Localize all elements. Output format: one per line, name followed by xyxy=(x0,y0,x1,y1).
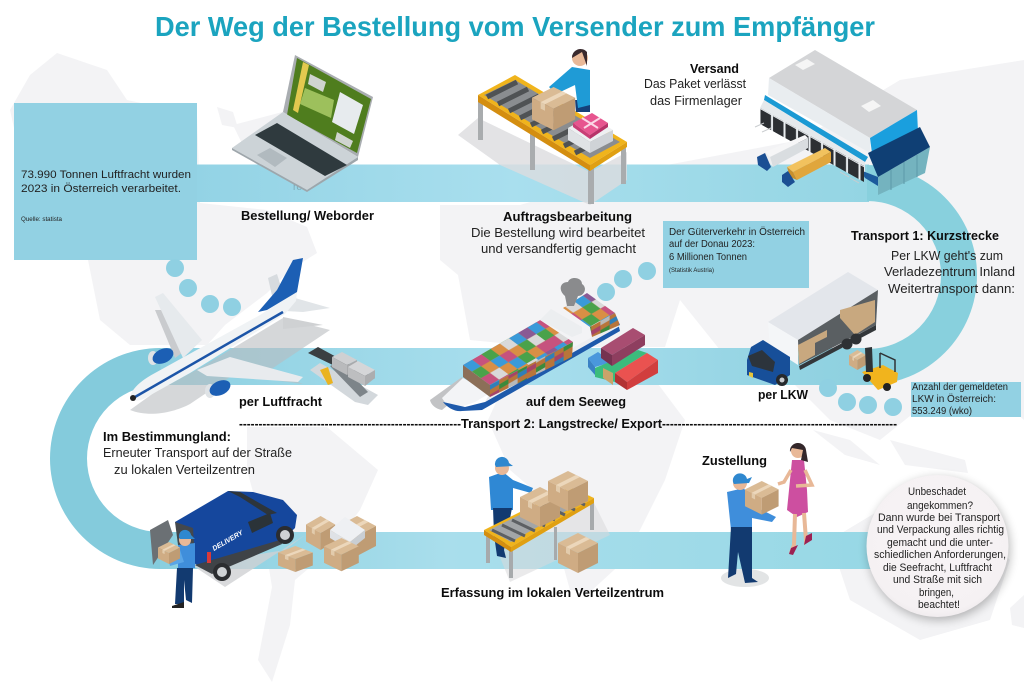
label: auf dem Seeweg: auf dem Seeweg xyxy=(526,394,626,409)
label: Auftragsbearbeitung: und versandfertig gemacht xyxy=(481,241,636,256)
icon: container ship xyxy=(430,278,620,411)
heading: Transport 2 with dashes: ------------------------------------------------------------ xyxy=(662,416,897,431)
label: Zustellung: Zustellung xyxy=(702,453,767,468)
label: Bestellung: Bestellung/ Weborder xyxy=(241,208,374,223)
info box: LKW: 553.249 (wko) xyxy=(912,406,972,417)
label: Im Bestimmungland: Im Bestimmungland: xyxy=(103,429,231,444)
dots: Donau xyxy=(597,262,656,301)
callout circle: gemacht und die unter- xyxy=(887,537,993,549)
info box: LKW: LKW in Österreich: xyxy=(912,393,996,405)
heading: Transport 2 with dashes: Transport 2: Langstrecke/ Export xyxy=(461,416,663,431)
callout circle: beachtet! xyxy=(918,599,960,611)
info box: Luftfracht xyxy=(14,103,197,260)
label: per LKW: per LKW xyxy=(758,387,809,402)
icon: courier handing parcel to customer xyxy=(721,443,812,587)
icon: packing table with worker xyxy=(458,49,627,205)
dots: LKW xyxy=(819,379,902,416)
route band xyxy=(50,164,977,569)
label: per Luftfracht: per Luftfracht xyxy=(239,394,323,409)
callout circle: bringen, xyxy=(919,587,954,599)
label: Auftragsbearbeitung: Auftragsbearbeitung xyxy=(503,209,632,224)
icon: scanning worker at conveyor xyxy=(484,457,610,582)
callout circle: und Straße mit sich xyxy=(893,574,982,586)
label: Im Bestimmungland xyxy=(103,429,292,477)
icon: parcels xyxy=(278,516,376,572)
info box: LKW xyxy=(911,382,1021,417)
label: Versand: Das Paket verlässt xyxy=(644,76,746,91)
icon: stacked containers xyxy=(588,328,658,390)
callout circle: schiedlichen Anforderungen, xyxy=(874,549,1006,561)
callout circle: Unbeschadet xyxy=(908,486,966,498)
icon: airplane xyxy=(130,258,330,414)
info box: Donau: auf der Donau 2023: xyxy=(669,239,755,250)
label: Im Bestimmungland: zu lokalen Verteilzentren xyxy=(114,462,255,477)
callout circle: Dann wurde bei Transport xyxy=(878,512,1000,524)
icon: delivery van with courier: DELIVERY xyxy=(212,529,246,553)
label: Transport 1: Transport 1: Kurzstrecke xyxy=(851,228,999,243)
callout circle: die Seefracht, Luftfracht xyxy=(883,562,992,574)
label: Erfassung: Erfassung im lokalen Verteilzentrum xyxy=(441,585,664,600)
label: Versand: Versand xyxy=(690,61,739,76)
label: Auftragsbearbeitung xyxy=(471,209,645,256)
icon: cargo loader xyxy=(308,347,378,405)
callout circle: und Verpackung alles richtig xyxy=(877,524,1004,536)
label: Transport 1: Per LKW geht's zum xyxy=(891,248,1003,263)
info box: Donau: Der Güterverkehr in Österreich xyxy=(669,226,805,238)
info box: Donau: (Statistik Austria) xyxy=(669,268,714,274)
label: Im Bestimmungland: Erneuter Transport auf der Straße xyxy=(103,445,292,460)
title: Der Weg der Bestellung vom Versender zum Empfänger xyxy=(155,11,875,42)
stray label behind laptop: re xyxy=(293,182,302,193)
label: Transport 1 xyxy=(851,228,1015,296)
icon: truck with forklift xyxy=(747,272,898,391)
label: Versand: das Firmenlager xyxy=(650,93,743,108)
heading: Transport 2 with dashes xyxy=(239,416,897,431)
info box: Donau: 6 Millionen Tonnen xyxy=(669,252,747,263)
label: Versand xyxy=(644,61,746,108)
icon: delivery van with courier xyxy=(150,491,305,608)
callout circle xyxy=(866,475,1010,620)
info box: Luftfracht: Quelle: statista xyxy=(21,217,63,223)
icon: laptop xyxy=(232,55,373,192)
info box: Donau xyxy=(663,221,809,288)
heading: Transport 2 with dashes: --------------------------------------------------------- xyxy=(239,416,461,431)
icon: warehouse with trucks xyxy=(755,50,930,195)
dots: Luftfracht xyxy=(166,259,241,316)
info box: LKW: Anzahl der gemeldeten xyxy=(912,382,1008,393)
label: Transport 1: Verladezentrum Inland xyxy=(884,264,1015,279)
callout circle: angekommen? xyxy=(907,500,973,512)
label: Transport 1: Weitertransport dann: xyxy=(888,281,1015,296)
info box: Luftfracht: 73.990 Tonnen Luftfracht wurden xyxy=(21,169,191,181)
label: Auftragsbearbeitung: Die Bestellung wird bearbeitet xyxy=(471,225,645,240)
info box: Luftfracht: 2023 in Österreich verarbeitet. xyxy=(21,183,181,195)
